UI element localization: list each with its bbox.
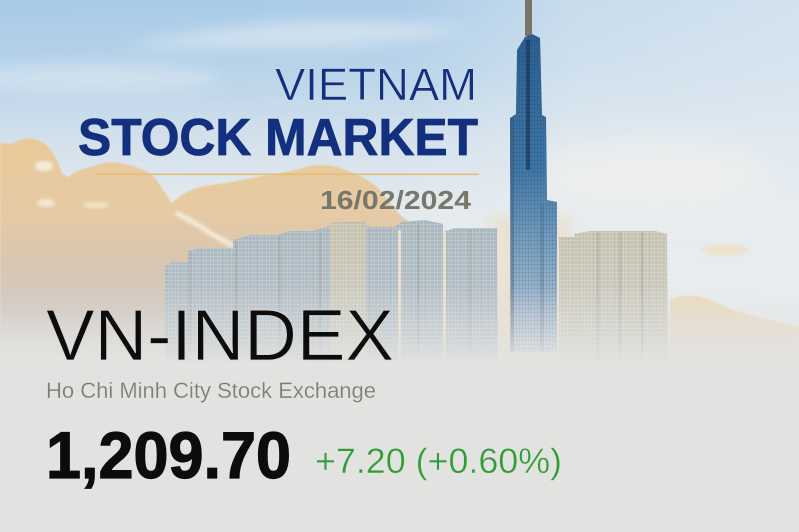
sunset clouds, left bbox=[0, 138, 420, 368]
subheading: exchange name: Ho Chi Minh City Stock Exchange bbox=[46, 378, 376, 403]
index change: +7.20 (+0.60%) bbox=[315, 442, 562, 481]
index value: 1,209.70 bbox=[46, 418, 291, 492]
apartment towers skyline bbox=[165, 220, 668, 362]
divider line bbox=[95, 174, 479, 175]
title: VIETNAM: VIETNAM bbox=[275, 59, 477, 110]
date: 16/02/2024 bbox=[320, 185, 472, 215]
sky background bbox=[0, 0, 799, 380]
bottom fade panel bbox=[0, 285, 799, 532]
Landmark 81 tower bbox=[510, 0, 557, 352]
title: STOCK MARKET: STOCK MARKET bbox=[78, 109, 478, 167]
heading: VN-INDEX: VN-INDEX bbox=[46, 296, 394, 376]
sunset clouds, right bbox=[490, 215, 799, 368]
